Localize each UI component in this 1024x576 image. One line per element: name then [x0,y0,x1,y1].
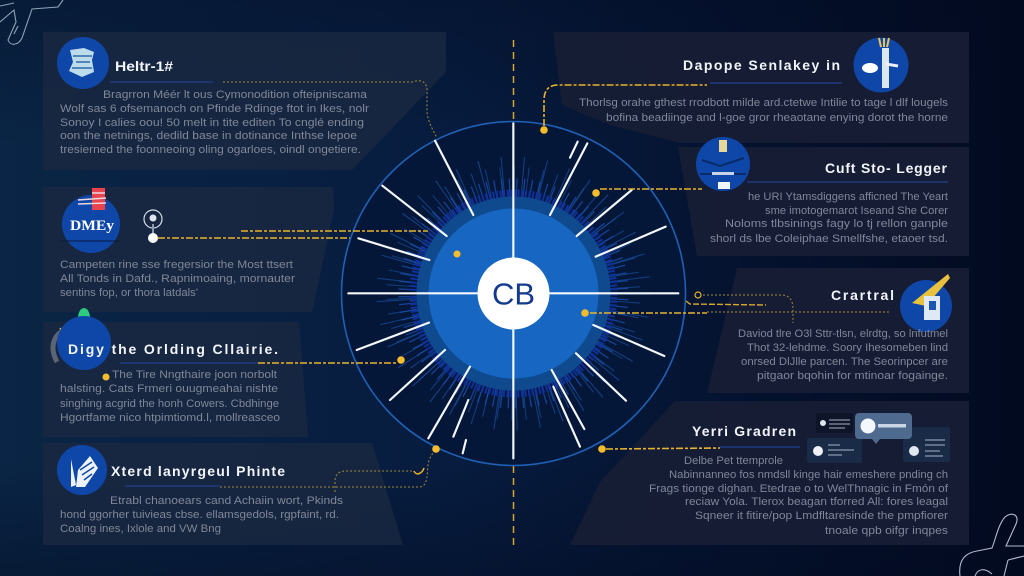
icon: DMEy badge: DMEy [70,218,115,234]
text block: Xterd [60,495,344,535]
text block: DMEy [60,259,295,299]
heading: Crartral: Crartral [831,287,894,303]
text block: Yerri: tnoale qpb oifgr inqpes [825,525,949,537]
connector nodes [397,126,606,453]
text block: Crartral: Thot 32-lehdme. Soory Ihesomeben lind [747,342,948,354]
text block: Yerri: Frags tionge dighan. Etedrae o to WelThnagic in Fmón of [649,483,949,495]
doodle: bottom-right corner hand [960,514,1024,576]
panel: Cuft Sto- Legger [678,137,969,256]
text block: Crartral [738,328,948,382]
text block: Digy: The Tire Nngthaire joon norbolt [112,369,277,381]
text block: DMEy: Campeten rine sse fregersior the Most ttsert [60,259,293,271]
center dashed vertical axis [512,40,514,545]
icon: document [57,445,107,495]
panel: Crartral [707,268,969,393]
center badge: CB [478,258,550,330]
connector lines from panels to the hub [158,81,890,492]
text block: Helth: tresierned the foonneoing oling ogarloes, oindl ongetiere. [60,144,361,156]
text block: Xterd: Etrabl chanoears cand Achaiin wort, Pkinds [110,495,344,507]
text block: Xterd: Coalng ines, Ixlole and VW Bng [60,523,221,535]
blue radial rays [396,176,630,410]
panel: Dispope Senlakey in [553,32,969,143]
text block: DMEy: sentins fop, or thora latdals' [60,287,198,299]
text block: Crartral: pitgaor bqohin for mtinoar fogainge. [757,370,948,382]
text block: Dispope: bofina beadiinge and l-goe gror rheaotane enying dorot the horne [606,112,948,124]
text block: Cuft [710,191,948,245]
text block: Digy: singhing acgrid the honh Cowers. Cbdhinge [60,398,279,410]
text block: Dispope [579,97,949,124]
heading: Xterd lanyrgeul Phinte: Xterd lanyrgeul Phinte [111,463,285,479]
text block: Cuft: sme imotogemarot Iseand She Corer [765,205,948,217]
blue core disc [416,196,610,390]
central radial diagram [342,122,686,466]
text block: Dispope: Thorlsg orahe gthest rrodbott milde ard.ctetwe Intilie to tage l dlf lougels [579,97,949,109]
panel: DMEy [43,187,334,312]
text block: DMEy: All Tonds in Dafd., Rapnimoaing, mornauter [60,273,295,285]
text block: Yerri: Delbe Pet ttemprole [684,455,783,467]
text block: Yerri [649,455,949,537]
text block: Yerri: Sqneer it fitire/pop Lmdfltaresinde the pmpfiorer [695,510,948,522]
heading: Cuft Sto- Legger: Cuft Sto- Legger [825,160,948,176]
icon: layered stack [57,37,109,89]
text block: Helth [60,89,369,156]
icon: DMEy badge [61,188,121,253]
heading: Helth: Heltr-1# [115,58,173,74]
text block: Yerri: Nabinnanneo fos nmdsll kinge hair emeshere pnding ch [669,469,948,481]
text block: Helth: Wolf sas 6 ofsemanoch on Pfinde Rdinge ftot in Ikes, nolr [60,103,369,115]
text block: Crartral: onrsed DlJlle parcen. The Seorinpcer are [741,356,948,368]
white spokes [348,123,678,458]
text block: Cuft: shorl ds lbe Coleiphae Smellfshe, etaoer tsd. [710,233,948,245]
panel: Xterd lanyrgeul Phinte [43,443,403,545]
icon: pin marker [144,210,162,243]
doodle: top-left corner hand [0,0,63,44]
heading: Dispope Senlakey in: Dapope Senlakey in [683,57,840,73]
outer ring [342,122,686,466]
text block: Digy [60,369,280,424]
panel: Yerri Gradren [570,401,969,545]
heading: Digy the Orlding Cllairie: Digy the Orlding Cllairie. [68,341,278,357]
text block: Cuft: he URI Ytamsdiggens afficned The Yeart [748,191,948,203]
icon: stacked badge [696,137,750,191]
icon: chat cards [807,413,950,463]
text block: Helth: Bragrron Méér lt ous Cymonodition ofteipniscama [103,89,368,101]
text block: Yerri: reciaw Yola. Tlerox beagan tforred All: fores leagal [685,496,948,508]
text block: Helth: Sonoy I calies oou! 50 melt in tite editen To cnglé ending [60,117,364,129]
panel: Digy the Orlding Cllairie [43,308,308,437]
text block: Xterd: hond ggorher tuivieas cbse. ellamsgedols, rgpfaint, rd. [60,509,339,521]
heading: Yerri Gradren: Yerri Gradren [692,423,796,439]
text block: Digy: Hgortfame nico htpimtiomd.l, mollreasceo [60,412,280,424]
icon: torch badge [900,274,952,332]
icon: figure badge [854,38,908,92]
center badge: CB: CB [492,276,535,312]
text block: Helth: oon the netnings, dedild base in dotinance Inthse lepoe [60,130,357,142]
text block: Digy: halsting. Cats Frmeri ouugmeahai nishte [60,383,278,395]
icon: badge with leaf [53,308,111,380]
text block: Crartral: Daviod tlre O3l Sttr-tlsn, elrdtg, so lnfutmel [738,328,948,340]
panel: Helth [43,32,446,170]
text block: Cuft: Noloms tlbsinings fagy lo tj rellon ganple [725,218,948,230]
